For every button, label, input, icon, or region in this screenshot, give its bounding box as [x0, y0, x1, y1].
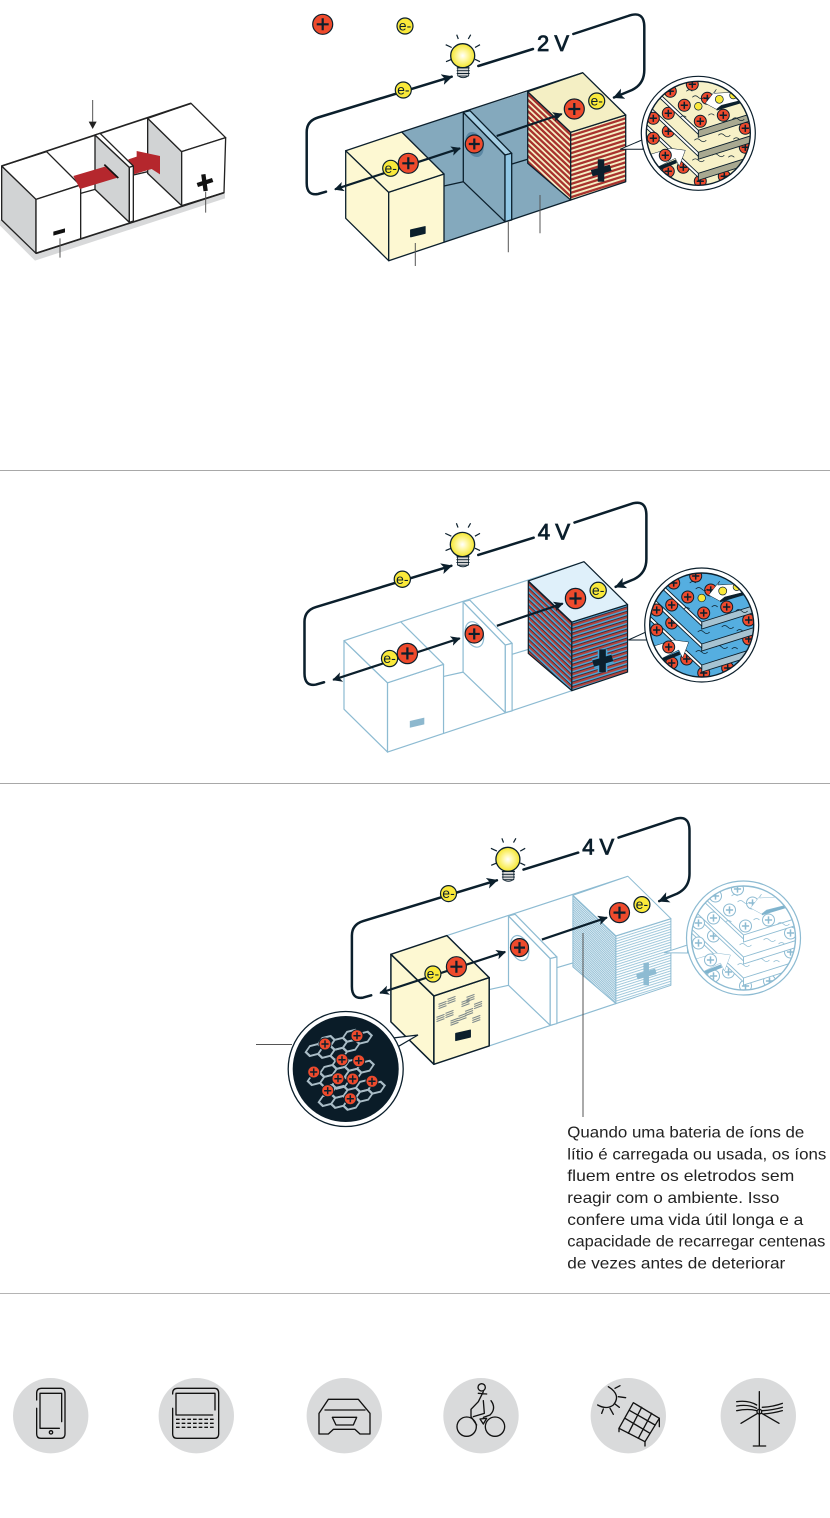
icon: electric bicycle: [443, 1378, 519, 1453]
negative electrode block: [2, 152, 81, 253]
positive electrode block: [528, 562, 628, 691]
electrons and ions: e-: [442, 885, 455, 901]
leader line: anode lens: [256, 1044, 292, 1046]
magnified lens: cathode layers: [640, 76, 756, 191]
positive electrode block: [528, 73, 626, 200]
circuit wire: [352, 818, 690, 998]
arrows: [380, 918, 607, 993]
minus symbol: [53, 228, 65, 236]
magnified lens: graphite with lithium ions: [288, 1012, 403, 1126]
separator edge and slot: [95, 133, 133, 222]
voltage label: 4 V: [538, 520, 570, 545]
shadow: [0, 193, 225, 261]
icon: car: [307, 1378, 382, 1453]
panel: diagram 4 V charged cathode: [304, 503, 772, 752]
electrons and ions: e-: [397, 82, 410, 98]
light bulb: [446, 35, 480, 78]
electrons and ions: [383, 82, 605, 176]
electrolyte background: [402, 92, 571, 242]
icon: wind turbine: [721, 1378, 796, 1453]
small diagram: battery structure: [0, 100, 226, 261]
electrons and ions: e-: [383, 651, 396, 667]
legend: electron: e-: [399, 18, 412, 34]
plus symbol: [197, 174, 213, 191]
graphite patches: [436, 994, 482, 1025]
negative electrode block: [391, 936, 489, 1064]
icon: tablet: [159, 1378, 234, 1453]
divider: [0, 1293, 830, 1294]
text block: explanation: confere uma vida útil longa e a: [567, 1212, 803, 1229]
electrons and ions: [425, 885, 650, 982]
text block: explanation: lítio é carregada ou usada, os íons: [567, 1146, 826, 1163]
legend: lithium ion: [313, 14, 333, 34]
arrow: pointer to separator: [89, 100, 97, 129]
leader lines: [415, 195, 540, 266]
electrons and ions: e-: [636, 896, 648, 912]
negative electrode block: [346, 132, 444, 261]
callout wedge: [628, 632, 647, 640]
graphene sheets: [306, 1026, 385, 1117]
electrons and ions: e-: [592, 583, 605, 599]
arrows: [333, 604, 563, 680]
positive electrode block: [573, 876, 671, 1004]
text block: explanation: de vezes antes de deteriorar: [567, 1255, 786, 1272]
text block: explanation: Quando uma bateria de íons de: [567, 1124, 804, 1142]
leader line to text: [582, 933, 584, 1117]
voltage label: 4 V: [582, 835, 615, 860]
icon: solar panel: [591, 1378, 666, 1453]
panel: discharge diagram 2 V: [307, 14, 768, 266]
callout wedge: [620, 140, 643, 149]
magnified lens: faded cathode: [686, 880, 802, 996]
arrows: [335, 114, 562, 189]
icon: smartphone: [13, 1378, 88, 1453]
red arrow through separator: [73, 151, 160, 189]
leader lines: [60, 192, 206, 258]
callout wedge: cathode: [664, 945, 688, 953]
circuit wire: [304, 503, 646, 685]
light bulb: [445, 523, 480, 567]
panel: diagram 4 V with graphite anode: [256, 818, 830, 1272]
electrons and ions: e-: [384, 160, 397, 176]
lithium ions: [308, 1030, 378, 1105]
divider: [0, 783, 830, 784]
cell outline: [344, 562, 584, 752]
voltage label: 2 V: [537, 31, 569, 56]
text block: explanation: fluem entre os eletrodos sem: [567, 1168, 794, 1185]
light bulb: [491, 838, 525, 881]
electrons and ions: e-: [396, 572, 409, 588]
callout wedge: anode: [393, 1035, 418, 1047]
electrons and ions: e-: [590, 93, 603, 109]
electrons and ions: [381, 571, 606, 667]
circuit wire: [307, 14, 644, 194]
cell outline: [447, 876, 628, 1046]
divider: [0, 470, 830, 471]
text block: explanation: capacidade de recarregar centenas: [567, 1234, 825, 1251]
separator: [444, 111, 528, 222]
electrons and ions: e-: [427, 966, 439, 982]
magnified lens: charged layers: [644, 567, 760, 683]
icons row: applications: [13, 1378, 796, 1453]
cell back wall and floor: [47, 118, 182, 239]
positive electrode block: [2, 103, 226, 253]
separator face: [95, 135, 129, 222]
text block: explanation: reagir com o ambiente. Isso: [567, 1190, 779, 1207]
